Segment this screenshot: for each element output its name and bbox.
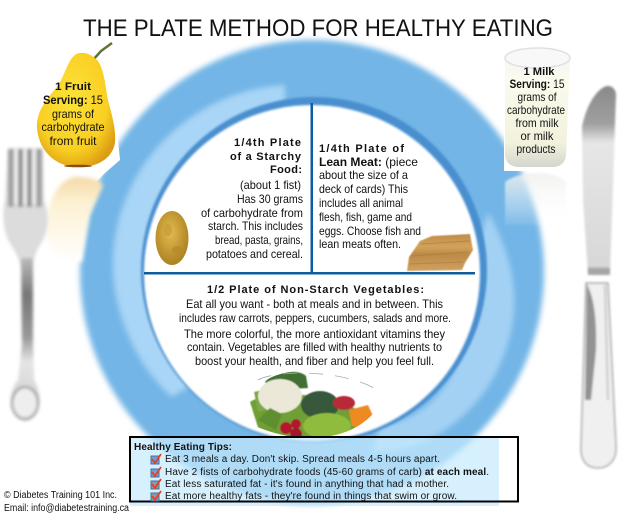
text: starchy food [201, 137, 303, 261]
text: non-starch vegetables: includes raw carrots, peppers, cucumbers, salads and more. [179, 311, 451, 325]
plate centre [144, 105, 480, 441]
text: non-starch vegetables: 1/2 Plate of Non-Starch Vegetables: [207, 284, 424, 296]
panel: healthy eating tips [130, 437, 518, 506]
icon: vegetable dish [249, 371, 374, 436]
pear [37, 43, 115, 167]
plate light band lower right [372, 212, 514, 452]
pear backdrop [30, 45, 120, 182]
text: milk serving: grams of [518, 90, 557, 104]
text: lean meat: eggs. Choose fish and [319, 224, 421, 238]
divider lines [144, 103, 475, 274]
panel: healthy eating tips: Healthy Eating Tips: [134, 442, 232, 453]
fork [3, 148, 48, 421]
text: non-starch vegetables: contain. Vegetables are filled with healthy nutrients to [187, 340, 442, 354]
knife [581, 86, 616, 468]
text: non-starch vegetables: Eat all you want - both at meals and in between. This [186, 297, 443, 311]
text: milk serving: or milk [520, 129, 554, 143]
text: starchy food: of carbohydrate from [201, 206, 303, 220]
text: non-starch vegetables: boost your health, and fiber and help you feel full. [195, 354, 434, 368]
text: lean meat [319, 143, 421, 251]
text: starchy food: potatoes and cereal. [206, 247, 303, 261]
text: starchy food: of a Starchy [230, 151, 302, 163]
text: lean meat: includes all animal [319, 196, 403, 210]
text: non-starch vegetables: The more colorful, the more antioxidant vitamins they [184, 327, 445, 341]
text: milk serving: 1 Milk [524, 66, 555, 78]
text: fruit serving: Serving: 15 [43, 93, 103, 107]
plate [80, 40, 544, 504]
text: lean meat: flesh, fish, game and [319, 210, 412, 224]
text: fruit serving: from fruit [50, 134, 97, 148]
text: starchy food: (about 1 fist) [240, 178, 301, 192]
text: starchy food: 1/4th Plate [234, 137, 301, 149]
plate light band left [113, 85, 285, 397]
panel: healthy eating tips: Eat less saturated fat - it's found in anything that had a mother. [165, 479, 449, 490]
tip icons [151, 454, 161, 501]
text: fruit serving [42, 81, 105, 148]
panel: healthy eating tips: Eat more healthy fats - they're found in things that swim or grow. [165, 491, 457, 502]
glass of milk backdrop [504, 46, 572, 171]
title: THE PLATE METHOD FOR HEALTHY EATING [83, 15, 553, 42]
text: lean meat: Lean Meat: (piece [319, 155, 418, 169]
text: lean meat: 1/4th Plate of [319, 143, 404, 155]
glass of milk [505, 48, 570, 167]
footer credit [4, 490, 129, 514]
pear reflection [47, 177, 103, 262]
text: fruit serving: grams of [52, 107, 95, 121]
text: milk serving: Serving: 15 [510, 77, 565, 91]
icon: lean meat [407, 234, 473, 271]
text: milk serving [507, 66, 565, 156]
text: milk serving: from milk [516, 116, 559, 130]
text: starchy food: Has 30 grams [237, 192, 303, 206]
text: starchy food: Food: [270, 164, 302, 176]
text: fruit serving: carbohydrate [42, 120, 105, 134]
footer credit: © Diabetes Training 101 Inc. [4, 490, 117, 501]
text: starchy food: starch. This includes [208, 219, 303, 233]
text: milk serving: products [516, 142, 556, 156]
panel: healthy eating tips: Have 2 fists of carbohydrate foods (45-60 grams of carb) at each meal. [165, 467, 489, 478]
text: starchy food: bread, pasta, grains, [215, 233, 303, 247]
panel: healthy eating tips: Eat 3 meals a day. Don't skip. Spread meals 4-5 hours apart. [165, 454, 440, 465]
text: milk serving: carbohydrate [507, 103, 565, 117]
text: non-starch vegetables [179, 284, 451, 368]
text: lean meat: deck of cards) This [319, 182, 408, 196]
text: lean meat: lean meats often. [319, 237, 401, 251]
icon: potato [156, 211, 188, 265]
footer credit: Email: info@diabetestraining.ca [4, 503, 129, 514]
text: lean meat: about the size of a [319, 168, 408, 182]
text: fruit serving: 1 Fruit [55, 81, 91, 93]
glass reflection [505, 173, 566, 225]
plate dark rim [141, 97, 487, 443]
